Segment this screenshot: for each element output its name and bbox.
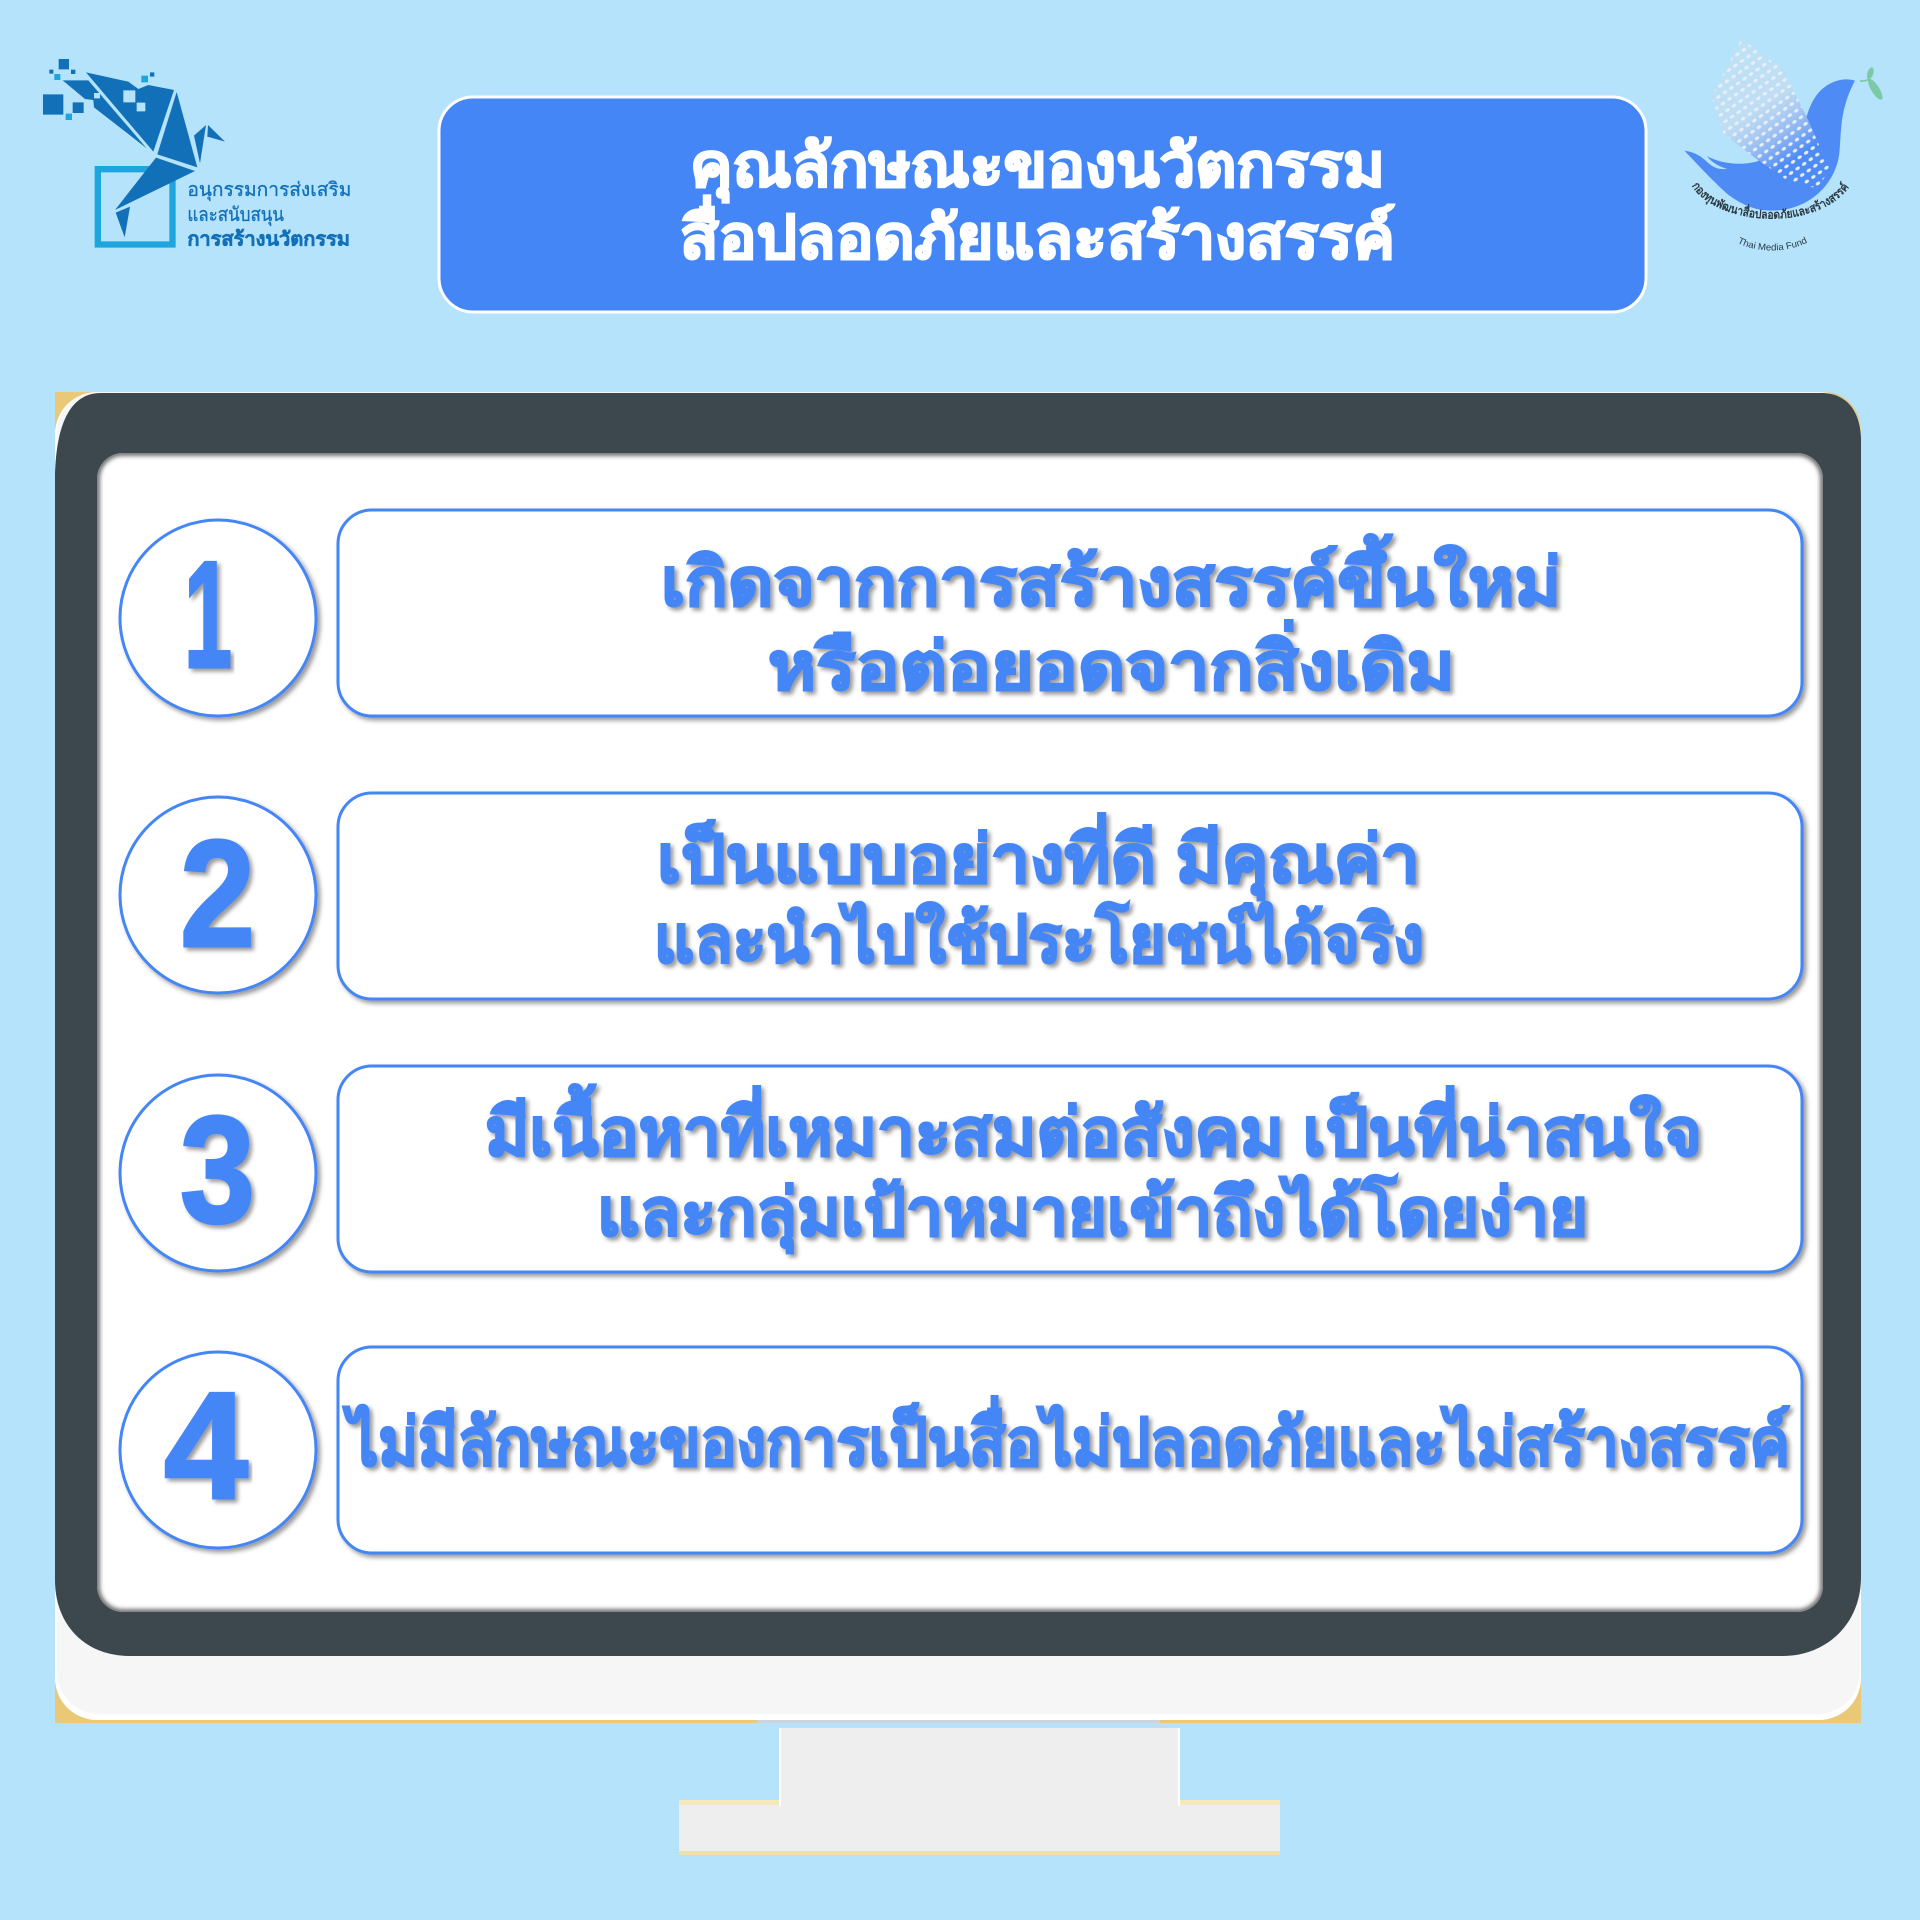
text box 3: และกลุ่มเป้าหมายเข้าถึงได้โดยง่าย: [597, 1173, 1588, 1254]
title text: คุณลักษณะของนวัตกรรม: [690, 132, 1385, 203]
title text: [680, 132, 1395, 271]
text box 3: [338, 1066, 1802, 1272]
text box 1: เกิดจากการสร้างสรรค์ขึ้นใหม่: [661, 533, 1561, 619]
number circle 1: [120, 520, 316, 716]
text box 4: ไม่มีลักษณะของการเป็นสื่อไม่ปลอดภัยและไม่สร้างสรรค์: [343, 1395, 1790, 1479]
title banner: [439, 97, 1646, 312]
number circle 2: 2: [180, 809, 255, 979]
number circle 2: [120, 797, 316, 993]
item 3: [120, 1066, 1802, 1272]
text box 4: [338, 1347, 1802, 1553]
icon: olive leaves: [1860, 67, 1885, 102]
number circle 4: 4: [164, 1361, 248, 1531]
item 2: [120, 793, 1802, 999]
logo: innovation subcommittee: [43, 59, 351, 251]
icon: origami crane: [43, 59, 225, 248]
title text: สื่อปลอดภัยและสร้างสรรค์: [680, 195, 1395, 271]
item 4: [120, 1347, 1802, 1553]
item 1: [120, 510, 1802, 716]
text box 2: และนำไปใช้ประโยชน์ได้จริง: [654, 900, 1424, 976]
monitor bezel: [55, 393, 1861, 1656]
logo text: อนุกรรมการส่งเสริม: [187, 180, 351, 202]
fund name arc text: กองทุนพัฒนาสื่อปลอดภัยและสร้างสรรค์: [1692, 180, 1849, 219]
logo: Thai Media Fund dove: [1684, 39, 1882, 250]
icon: dove wing: [1712, 38, 1830, 188]
english arc text: Thai Media Fund: [1740, 236, 1807, 250]
logo text: การสร้างนวัตกรรม: [187, 229, 350, 251]
monitor chin: [55, 392, 1861, 1723]
number circle 3: [120, 1075, 316, 1271]
monitor: [55, 392, 1861, 1855]
text box 3: มีเนื้อหาที่เหมาะสมต่อสังคม เป็นที่น่าสนใจ: [485, 1083, 1702, 1169]
number circle 1: 1: [184, 530, 232, 700]
text box 1: [338, 510, 1802, 716]
text box 2: [338, 793, 1802, 999]
screen: [97, 453, 1823, 1612]
icon: dove body: [1684, 79, 1855, 211]
logo text: และสนับสนุน: [187, 205, 284, 227]
text box 2: เป็นแบบอย่างที่ดี มีคุณค่า: [657, 812, 1420, 901]
text box 1: หรือต่อยอดจากสิ่งเดิม: [768, 619, 1455, 703]
logo text: [187, 180, 351, 251]
monitor stand: [679, 1728, 1280, 1855]
number circle 4: [120, 1352, 316, 1548]
number circle 3: 3: [180, 1085, 255, 1255]
